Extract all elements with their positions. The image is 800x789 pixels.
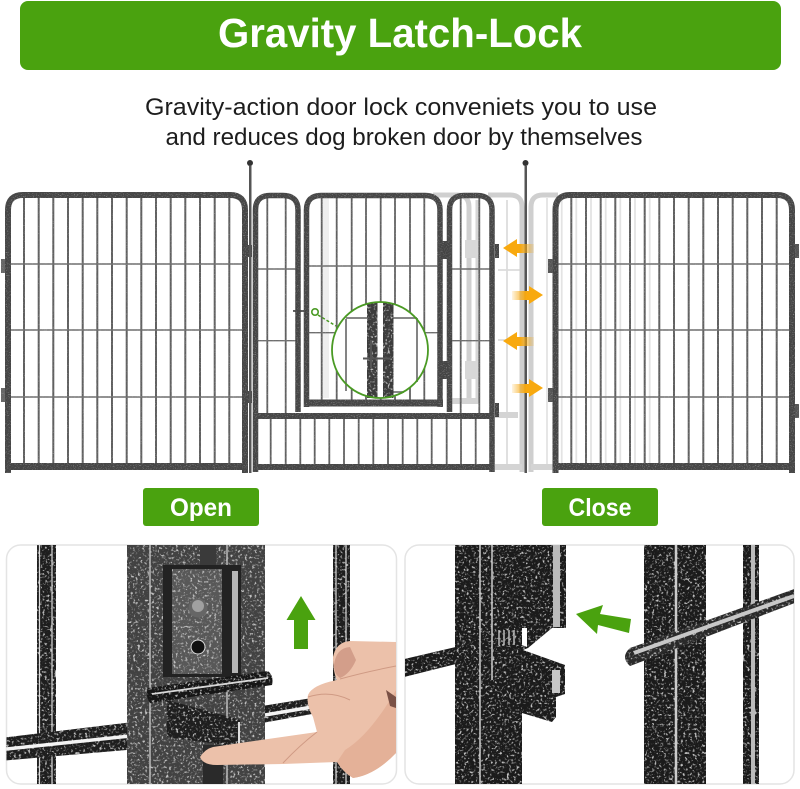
horizontal rods [0, 698, 312, 761]
striker rod [625, 587, 800, 666]
title banner [20, 1, 781, 70]
arrow: orange left 2 [503, 332, 534, 350]
latch plate with bolt and hole [163, 565, 241, 677]
bars [267, 198, 476, 464]
panel: left fence panel [1, 195, 252, 473]
bars [571, 198, 777, 463]
button: Open: Open [170, 494, 232, 522]
right vertical bar [333, 545, 350, 785]
main post [127, 545, 265, 785]
arrow: green left [576, 605, 631, 634]
panel: open latch photo [0, 545, 396, 785]
latch post with plate and hook [400, 545, 566, 785]
button: Close [542, 488, 658, 526]
description text: and reduces dog broken door by themselves [166, 124, 642, 151]
arrow: orange right 1 [512, 286, 543, 304]
ghost gate: closed position outline [325, 195, 650, 472]
button: Open [143, 488, 259, 526]
pole: right latch post [522, 160, 528, 473]
callout: latch magnifier circle [312, 302, 428, 398]
title banner: Gravity Latch-Lock [218, 10, 582, 56]
arrow: green up [286, 596, 316, 649]
hand pressing latch [200, 641, 396, 778]
panel: closed latch photo [400, 545, 800, 785]
thin bar [743, 545, 759, 785]
description text [145, 94, 657, 151]
bars [24, 198, 229, 463]
arrow: orange right 2 [512, 379, 543, 397]
panel: right fence panel [548, 195, 799, 473]
hook and lower latch [147, 671, 272, 747]
arrow: orange left 1 [503, 239, 534, 257]
button: Close: Close [568, 494, 632, 522]
panel: gate frame assembly [255, 196, 499, 472]
description text: Gravity-action door lock conveniets you to use [145, 94, 657, 121]
pole: left latch post [247, 160, 253, 473]
right post [644, 545, 706, 785]
left vertical bar [37, 545, 56, 785]
